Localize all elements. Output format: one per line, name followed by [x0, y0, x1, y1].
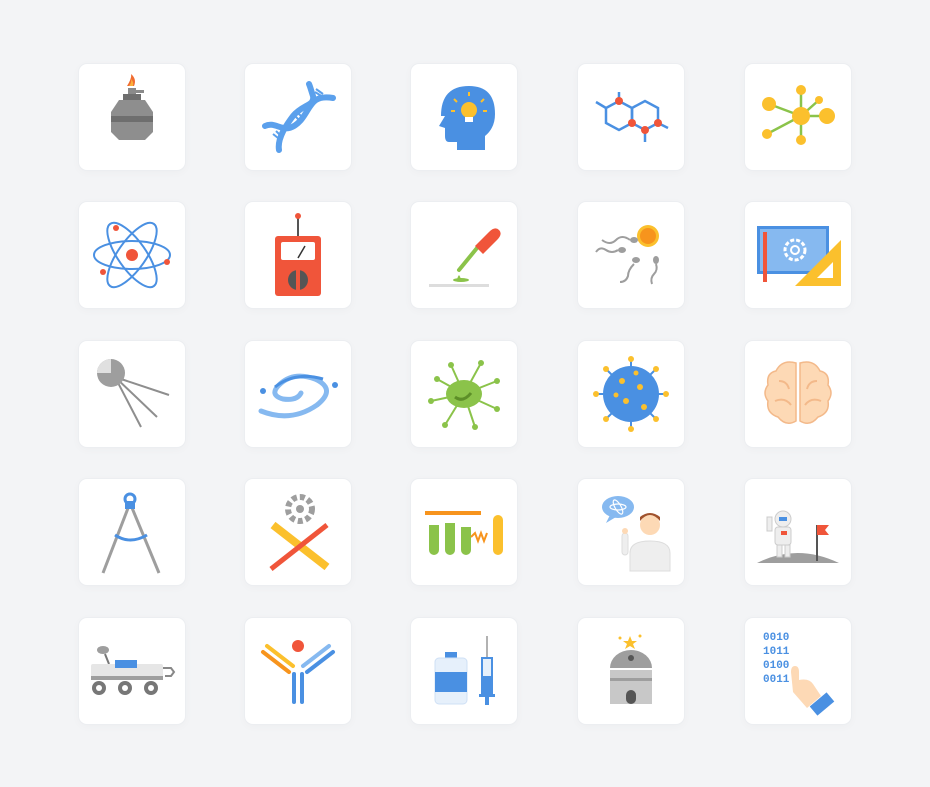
card: vial and syringe [411, 618, 517, 724]
card: sperm and egg [578, 202, 684, 308]
card: atom [79, 202, 185, 308]
card: dropper [411, 202, 517, 308]
card: antibody [245, 618, 351, 724]
card: head with bulb [411, 64, 517, 170]
card: network [745, 64, 851, 170]
card: bacteria [411, 341, 517, 447]
card: binary code with hand: 1011 [763, 646, 790, 658]
card: binary code with hand: 0100 [763, 660, 789, 672]
card: binary code with hand [745, 618, 851, 724]
card: sputnik [79, 341, 185, 447]
card: binary code with hand: 0011 [763, 674, 790, 686]
card: binary code with hand: 0010 [763, 632, 789, 644]
card: gear pencil ruler [245, 479, 351, 585]
card: scientist [578, 479, 684, 585]
card: galaxy [245, 341, 351, 447]
card: observatory [578, 618, 684, 724]
card: compass [79, 479, 185, 585]
card: bunsen burner [79, 64, 185, 170]
card: test tubes [411, 479, 517, 585]
card: virus [578, 341, 684, 447]
card: dna [245, 64, 351, 170]
card: astronaut on moon [745, 479, 851, 585]
card: rover [79, 618, 185, 724]
card: molecule [578, 64, 684, 170]
card: meter [245, 202, 351, 308]
card: brain [745, 341, 851, 447]
card: blueprint [745, 202, 851, 308]
